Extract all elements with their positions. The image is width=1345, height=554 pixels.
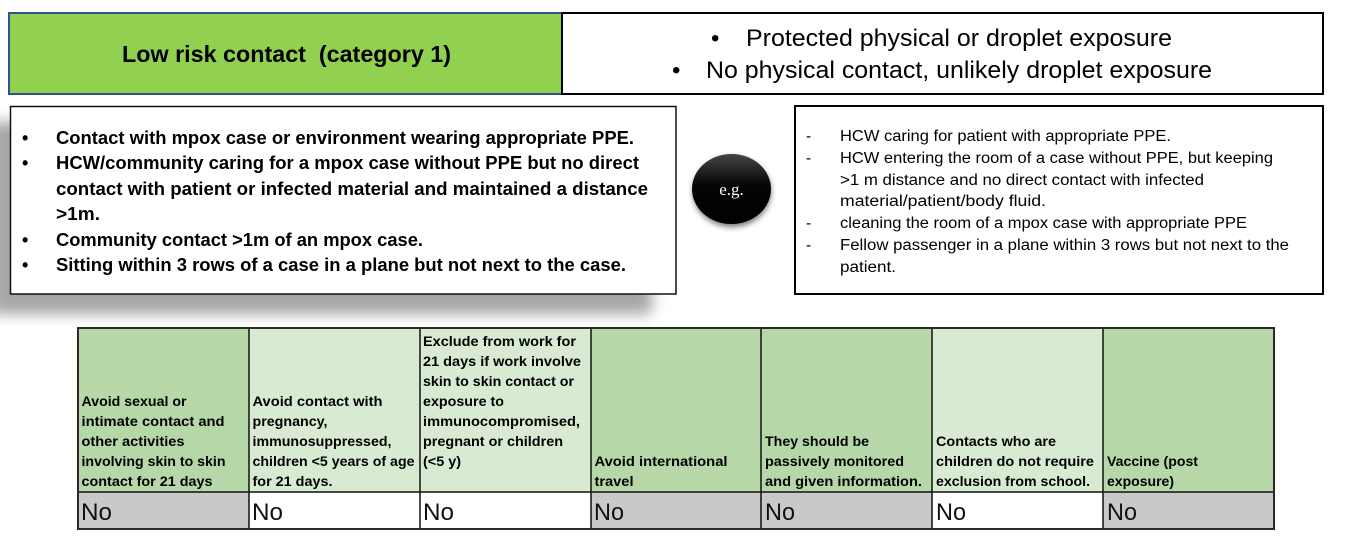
panel: exposure summary: • [672, 57, 680, 84]
column 3: work exclusion [420, 328, 591, 529]
column 2: vulnerable contacts: No [252, 499, 283, 526]
panel: examples: HCW entering the room of a case without PPE, but keeping [840, 150, 1273, 167]
column 2: vulnerable contacts: for 21 days. [252, 473, 332, 489]
column 1: sexual contact: No [81, 499, 112, 526]
panel: low risk contact definitions: • [22, 255, 28, 275]
column 1: sexual contact: Avoid sexual or [82, 393, 187, 409]
column 2: vulnerable contacts: children <5 years of age [252, 453, 415, 469]
column 2: vulnerable contacts [249, 328, 420, 529]
panel: low risk contact definitions: Sitting within 3 rows of a case in a plane but not next to the case. [56, 255, 626, 275]
panel: low risk contact definitions: >1m. [56, 204, 100, 224]
column 5: passive monitoring: They should be [765, 433, 869, 449]
panel: examples: >1 m distance and no direct contact with infected [840, 172, 1204, 189]
column 6: school exclusion: Contacts who are [936, 433, 1056, 449]
column 6: school exclusion: No [936, 499, 966, 526]
column 1: sexual contact [78, 328, 249, 529]
panel: examples: HCW caring for patient with appropriate PPE. [840, 128, 1171, 145]
column 2: vulnerable contacts: immunosuppressed, [252, 433, 392, 449]
column 2: vulnerable contacts: pregnancy, [252, 413, 328, 429]
icon: e.g. black circle [692, 154, 771, 227]
column 3: work exclusion: No [423, 499, 454, 526]
column 6: school exclusion [932, 328, 1103, 529]
column 7: post exposure vaccine [1103, 328, 1274, 529]
table: recommended actions [78, 328, 1274, 529]
panel: examples: material/patient/body fluid. [840, 193, 1046, 210]
panel: examples: - [806, 150, 811, 167]
column 1: sexual contact: other activities [82, 433, 185, 449]
panel: low risk contact definitions: • [22, 128, 28, 148]
panel: low risk contact definitions: Community contact >1m of an mpox case. [56, 230, 423, 250]
panel: exposure summary: No physical contact, unlikely droplet exposure [706, 57, 1212, 84]
panel: examples: - [806, 128, 811, 145]
panel: examples [795, 106, 1323, 294]
panel: low risk contact definitions: • [22, 153, 28, 173]
banner: low risk contact title: Low risk contact (category 1) [122, 41, 451, 67]
column 6: school exclusion: exclusion from school. [936, 473, 1090, 489]
column 3: work exclusion: exposure to [423, 393, 504, 409]
column 3: work exclusion: Exclude from work for [423, 333, 577, 349]
column 1: sexual contact: involving skin to skin [82, 453, 226, 469]
panel: low risk contact definitions: Contact with mpox case or environment wearing appropriate PPE. [56, 128, 634, 148]
column 4: international travel: No [594, 499, 624, 526]
column 3: work exclusion: (<5 y) [423, 453, 461, 469]
column 7: post exposure vaccine: Vaccine (post [1107, 453, 1198, 469]
panel: exposure summary: • [711, 25, 719, 52]
column 2: vulnerable contacts: Avoid contact with [252, 393, 382, 409]
panel: examples: cleaning the room of a mpox case with appropriate PPE [840, 215, 1247, 232]
panel: low risk contact definitions: • [22, 230, 28, 250]
column 5: passive monitoring: No [765, 499, 795, 526]
column 5: passive monitoring: and given information. [765, 473, 922, 489]
panel: exposure summary [562, 13, 1323, 94]
panel: low risk contact definitions: contact with patient or infected material and maintained a distance [56, 179, 648, 199]
panel: exposure summary: Protected physical or droplet exposure [746, 25, 1172, 52]
banner: low risk contact title [9, 13, 562, 94]
column 3: work exclusion: 21 days if work involve [423, 353, 581, 369]
column 1: sexual contact: contact for 21 days [82, 473, 213, 489]
icon: e.g. black circle: e.g. [719, 180, 744, 199]
panel: low risk contact definitions: HCW/community caring for a mpox case without PPE but no direct [56, 153, 639, 173]
column 5: passive monitoring [761, 328, 932, 529]
column 7: post exposure vaccine: exposure) [1107, 473, 1174, 489]
column 3: work exclusion: immunocompromised, [423, 413, 580, 429]
column 6: school exclusion: children do not require [936, 453, 1094, 469]
column 7: post exposure vaccine: No [1107, 499, 1137, 526]
column 1: sexual contact: intimate contact and [82, 413, 224, 429]
panel: examples: - [806, 215, 811, 232]
panel: examples: patient. [840, 259, 896, 276]
column 4: international travel [591, 328, 761, 529]
column 5: passive monitoring: passively monitored [765, 453, 904, 469]
column 3: work exclusion: pregnant or children [423, 433, 563, 449]
column 3: work exclusion: skin to skin contact or [423, 373, 575, 389]
panel: examples: - [806, 237, 811, 254]
panel: low risk contact definitions [0, 106, 676, 314]
column 4: international travel: travel [594, 473, 634, 489]
panel: examples: Fellow passenger in a plane within 3 rows but not next to the [840, 237, 1289, 254]
column 4: international travel: Avoid international [594, 453, 728, 469]
